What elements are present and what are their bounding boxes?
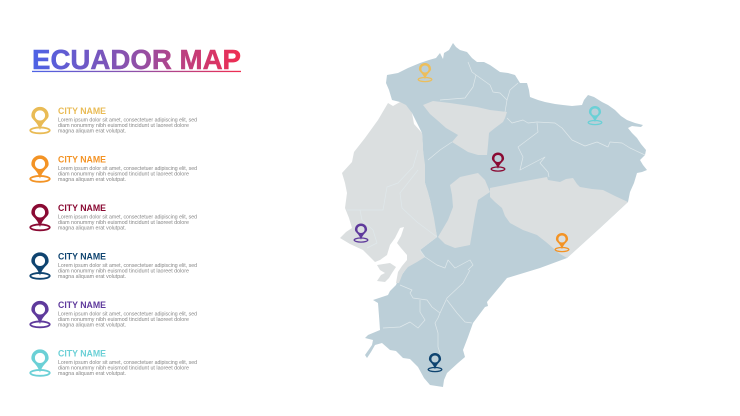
city item: teal: diam nonummy nibh euismod tincidunt ut laoreet dolore — [58, 366, 189, 372]
city item: maroon: magna aliquam erat volutpat. — [58, 226, 126, 232]
city item: maroon: CITY NAME — [58, 203, 107, 214]
city item: navy: CITY NAME — [58, 252, 107, 262]
pin: maroon — [491, 152, 505, 171]
pin: purple — [354, 223, 368, 242]
city item: maroon: diam nonummy nibh euismod tincidunt ut laoreet dolore — [58, 220, 189, 226]
city item: navy: diam nonummy nibh euismod tincidunt ut laoreet dolore — [58, 268, 189, 274]
city item: teal: magna aliquam erat volutpat. — [58, 371, 126, 377]
pin: orange — [555, 233, 569, 252]
city item: teal — [30, 348, 197, 377]
map: Ecuador — [340, 43, 647, 387]
city item: yellow: diam nonummy nibh euismod tincidunt ut laoreet dolore — [58, 123, 189, 129]
pin: teal — [588, 106, 602, 125]
map: blue provinces base — [365, 43, 647, 387]
city item: purple: magna aliquam erat volutpat. — [58, 322, 126, 328]
map: center north gray province — [423, 101, 507, 155]
city item: navy — [30, 252, 197, 280]
pin: navy — [428, 353, 442, 372]
city item: purple: diam nonummy nibh euismod tincidunt ut laoreet dolore — [58, 317, 189, 323]
city item: yellow: Lorem ipsum dolor sit amet, consectetuer adipiscing elit, sed — [58, 118, 197, 124]
city item: orange: magna aliquam erat volutpat. — [58, 177, 126, 183]
map: west gray provinces — [340, 102, 437, 283]
city item: teal: CITY NAME — [58, 348, 107, 360]
city item: orange: diam nonummy nibh euismod tincidunt ut laoreet dolore — [58, 172, 189, 178]
map: province border lines — [347, 62, 645, 353]
city item: yellow — [30, 106, 197, 134]
city item: navy: magna aliquam erat volutpat. — [58, 274, 126, 280]
city item: purple: Lorem ipsum dolor sit amet, consectetuer adipiscing elit, sed — [58, 312, 197, 318]
city item: orange: Lorem ipsum dolor sit amet, consectetuer adipiscing elit, sed — [58, 166, 197, 172]
city item: maroon: Lorem ipsum dolor sit amet, consectetuer adipiscing elit, sed — [58, 214, 197, 220]
city item: navy: Lorem ipsum dolor sit amet, consectetuer adipiscing elit, sed — [58, 263, 197, 269]
pin: yellow — [418, 63, 432, 82]
map: east gray province — [490, 177, 628, 258]
map: gulf island — [377, 263, 396, 282]
title: ECUADOR MAP — [32, 44, 241, 75]
city item: yellow: CITY NAME — [58, 106, 107, 117]
city item: teal: Lorem ipsum dolor sit amet, consectetuer adipiscing elit, sed — [58, 360, 197, 366]
city item: orange — [30, 154, 197, 183]
city item: purple: CITY NAME — [58, 300, 107, 311]
list: cities — [30, 106, 197, 377]
city item: maroon — [30, 203, 197, 232]
city item: purple — [30, 300, 197, 328]
map: center gray province — [438, 173, 490, 248]
city item: yellow: magna aliquam erat volutpat. — [58, 128, 126, 134]
city item: orange: CITY NAME — [58, 154, 107, 166]
